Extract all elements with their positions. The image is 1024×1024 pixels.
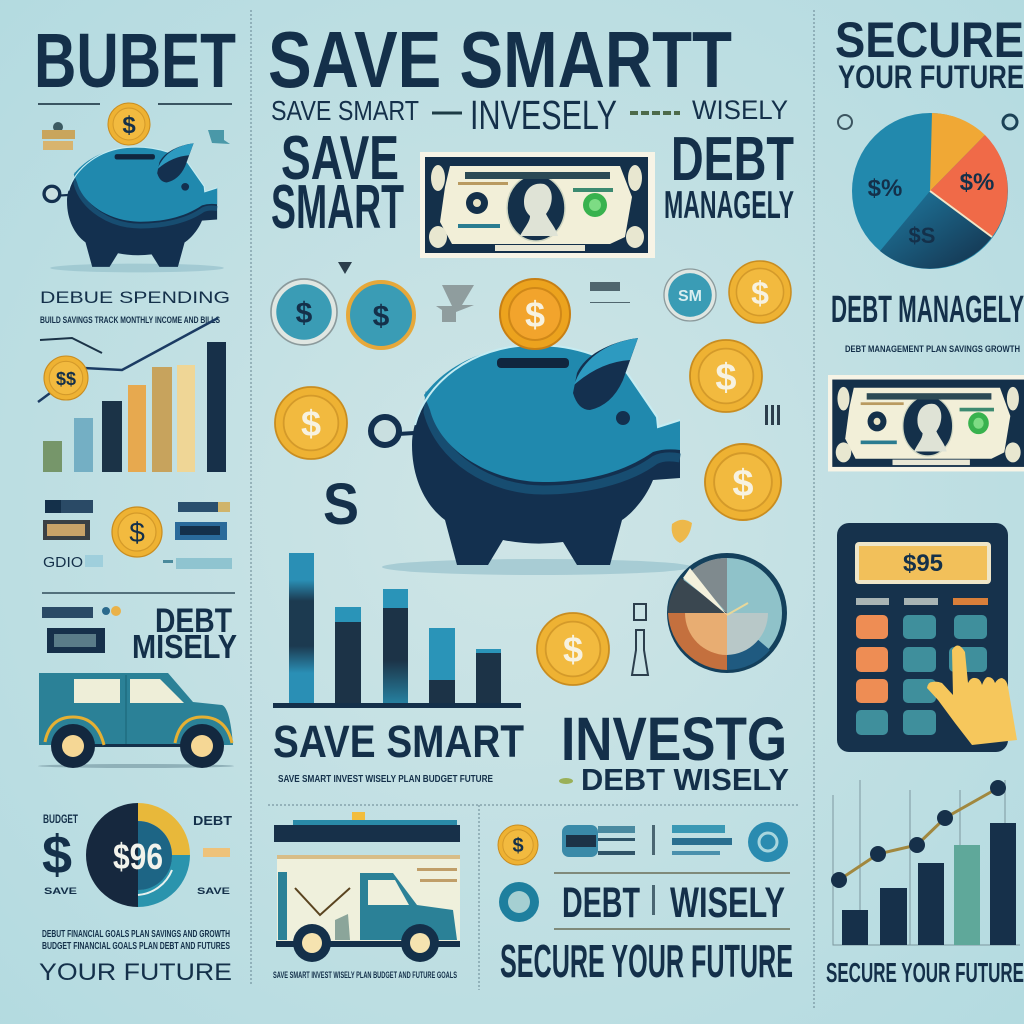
caption: your future: DEBUT FINANCIAL GOALS PLAN SAVINGS AND GROWTH (42, 929, 230, 940)
bar chart: two-tone bars (273, 553, 521, 708)
subheading row (271, 92, 788, 138)
donut chart: percent: BUDGET (43, 812, 78, 826)
heading: save smart: SAVE SMART INVEST WISELY PLAN BUDGET FUTURE (278, 774, 493, 785)
icons: coins around piggy: SM (678, 288, 702, 305)
large coin on piggy (500, 279, 570, 349)
bar chart: rising bars: $$ (56, 369, 76, 389)
icons: coins around piggy: $ (563, 629, 583, 670)
icons: coins around piggy: $ (296, 297, 313, 330)
icon: car (38, 673, 234, 768)
blurred line (42, 592, 235, 594)
heading: budget: BUBET (34, 18, 236, 104)
row: cards and coin: $ (129, 517, 145, 548)
icons: coins around piggy: $ (373, 300, 390, 333)
caption: blurred text (40, 288, 230, 325)
large coin on piggy: $ (525, 294, 545, 335)
donut chart: percent (42, 803, 232, 907)
dollar bill (828, 375, 1024, 471)
heading: secure your future (835, 12, 1024, 95)
truck panel (273, 812, 460, 980)
row: cards and coin: GDIO (43, 554, 83, 571)
heading: debt wisely: WISELY (670, 879, 785, 927)
icon: small piggy bank (44, 143, 224, 272)
heading: debt wisely (42, 602, 237, 665)
subheading row: SAVE SMART (271, 95, 419, 126)
heading: save smart (273, 716, 524, 785)
line and bar chart (831, 780, 1020, 945)
small marks (838, 115, 1017, 129)
heading: save smart stacked (271, 124, 404, 242)
icon: large piggy bank (371, 338, 692, 575)
mini icons row: $ (512, 835, 524, 857)
truck panel: SAVE SMART INVEST WISELY PLAN BUDGET AND FUTURE GOALS (273, 970, 457, 980)
icon: pointing hand (927, 645, 1017, 745)
heading: invest debt wisely: INVESTG (561, 705, 787, 773)
calculator: $95 (903, 550, 943, 577)
icons: coins around piggy: $ (732, 463, 754, 505)
heading: save smart: SAVE SMART (273, 716, 524, 767)
subheading row: INVESELY (470, 92, 617, 138)
icons: coins around piggy: $ (751, 275, 769, 311)
heading: debt wisely: DEBT (155, 602, 232, 640)
pie chart (852, 113, 1008, 269)
heading: invest debt wisely (559, 705, 789, 797)
caption: blurred text: BUILD SAVINGS TRACK MONTHLY INCOME AND BILLS (40, 315, 220, 325)
heading: save smart stacked: SAVE (281, 124, 399, 193)
heading: debt wisely (562, 879, 785, 927)
caption: blurred text: DEBUE SPENDING (40, 288, 230, 307)
heading: debt wisely: MISELY (132, 628, 237, 665)
icons: coins around piggy (271, 261, 791, 685)
heading: save smart stacked: SMART (271, 173, 404, 242)
caption: your future: YOUR FUTURE (39, 959, 232, 986)
mini icons row (498, 822, 788, 922)
donut chart: percent: SAVE (197, 886, 230, 896)
pie chart: $% (868, 175, 902, 202)
bar chart: rising bars (38, 318, 226, 472)
small decorative marks (338, 262, 780, 675)
small text lines (38, 103, 232, 105)
icon: small coin: $ (122, 112, 136, 139)
caption: your future: BUDGET FINANCIAL GOALS PLAN DEBT AND FUTURES (42, 941, 230, 952)
donut chart: percent: DEBT (193, 813, 232, 828)
pie chart: clock style (667, 553, 787, 673)
heading: debt wisely: DEBT (562, 879, 640, 927)
small glyph: s symbol: S (323, 472, 359, 537)
dollar bill (420, 152, 655, 258)
icon: small note (42, 122, 75, 150)
icons: coins around piggy: $ (301, 403, 321, 444)
icon: small teal card (208, 130, 230, 144)
donut chart: percent: $96 (113, 836, 163, 877)
subheading row: WISELY (692, 95, 788, 125)
caption: your future (39, 929, 232, 986)
icons: coins around piggy: $ (715, 357, 737, 399)
pie chart: $S (909, 223, 935, 248)
panel: right column (826, 12, 1024, 988)
donut chart: percent: $ (42, 825, 72, 885)
heading: invest debt wisely: DEBT WISELY (581, 762, 789, 797)
heading: debt managely: MANAGELY (664, 184, 794, 227)
donut chart: percent: SAVE (44, 886, 77, 896)
heading: debt managely (664, 125, 794, 227)
panel: center column (268, 15, 794, 987)
heading: debt managely: DEBT (671, 125, 794, 194)
pie chart: $% (960, 169, 994, 196)
row: cards and coin (43, 500, 232, 571)
icon: small coin (108, 103, 150, 145)
panel: left column (34, 18, 237, 986)
heading: save smartt: SAVE SMARTT (268, 15, 732, 104)
calculator (837, 523, 1017, 752)
heading: secure your future: SECURE YOUR FUTURE (500, 935, 793, 987)
